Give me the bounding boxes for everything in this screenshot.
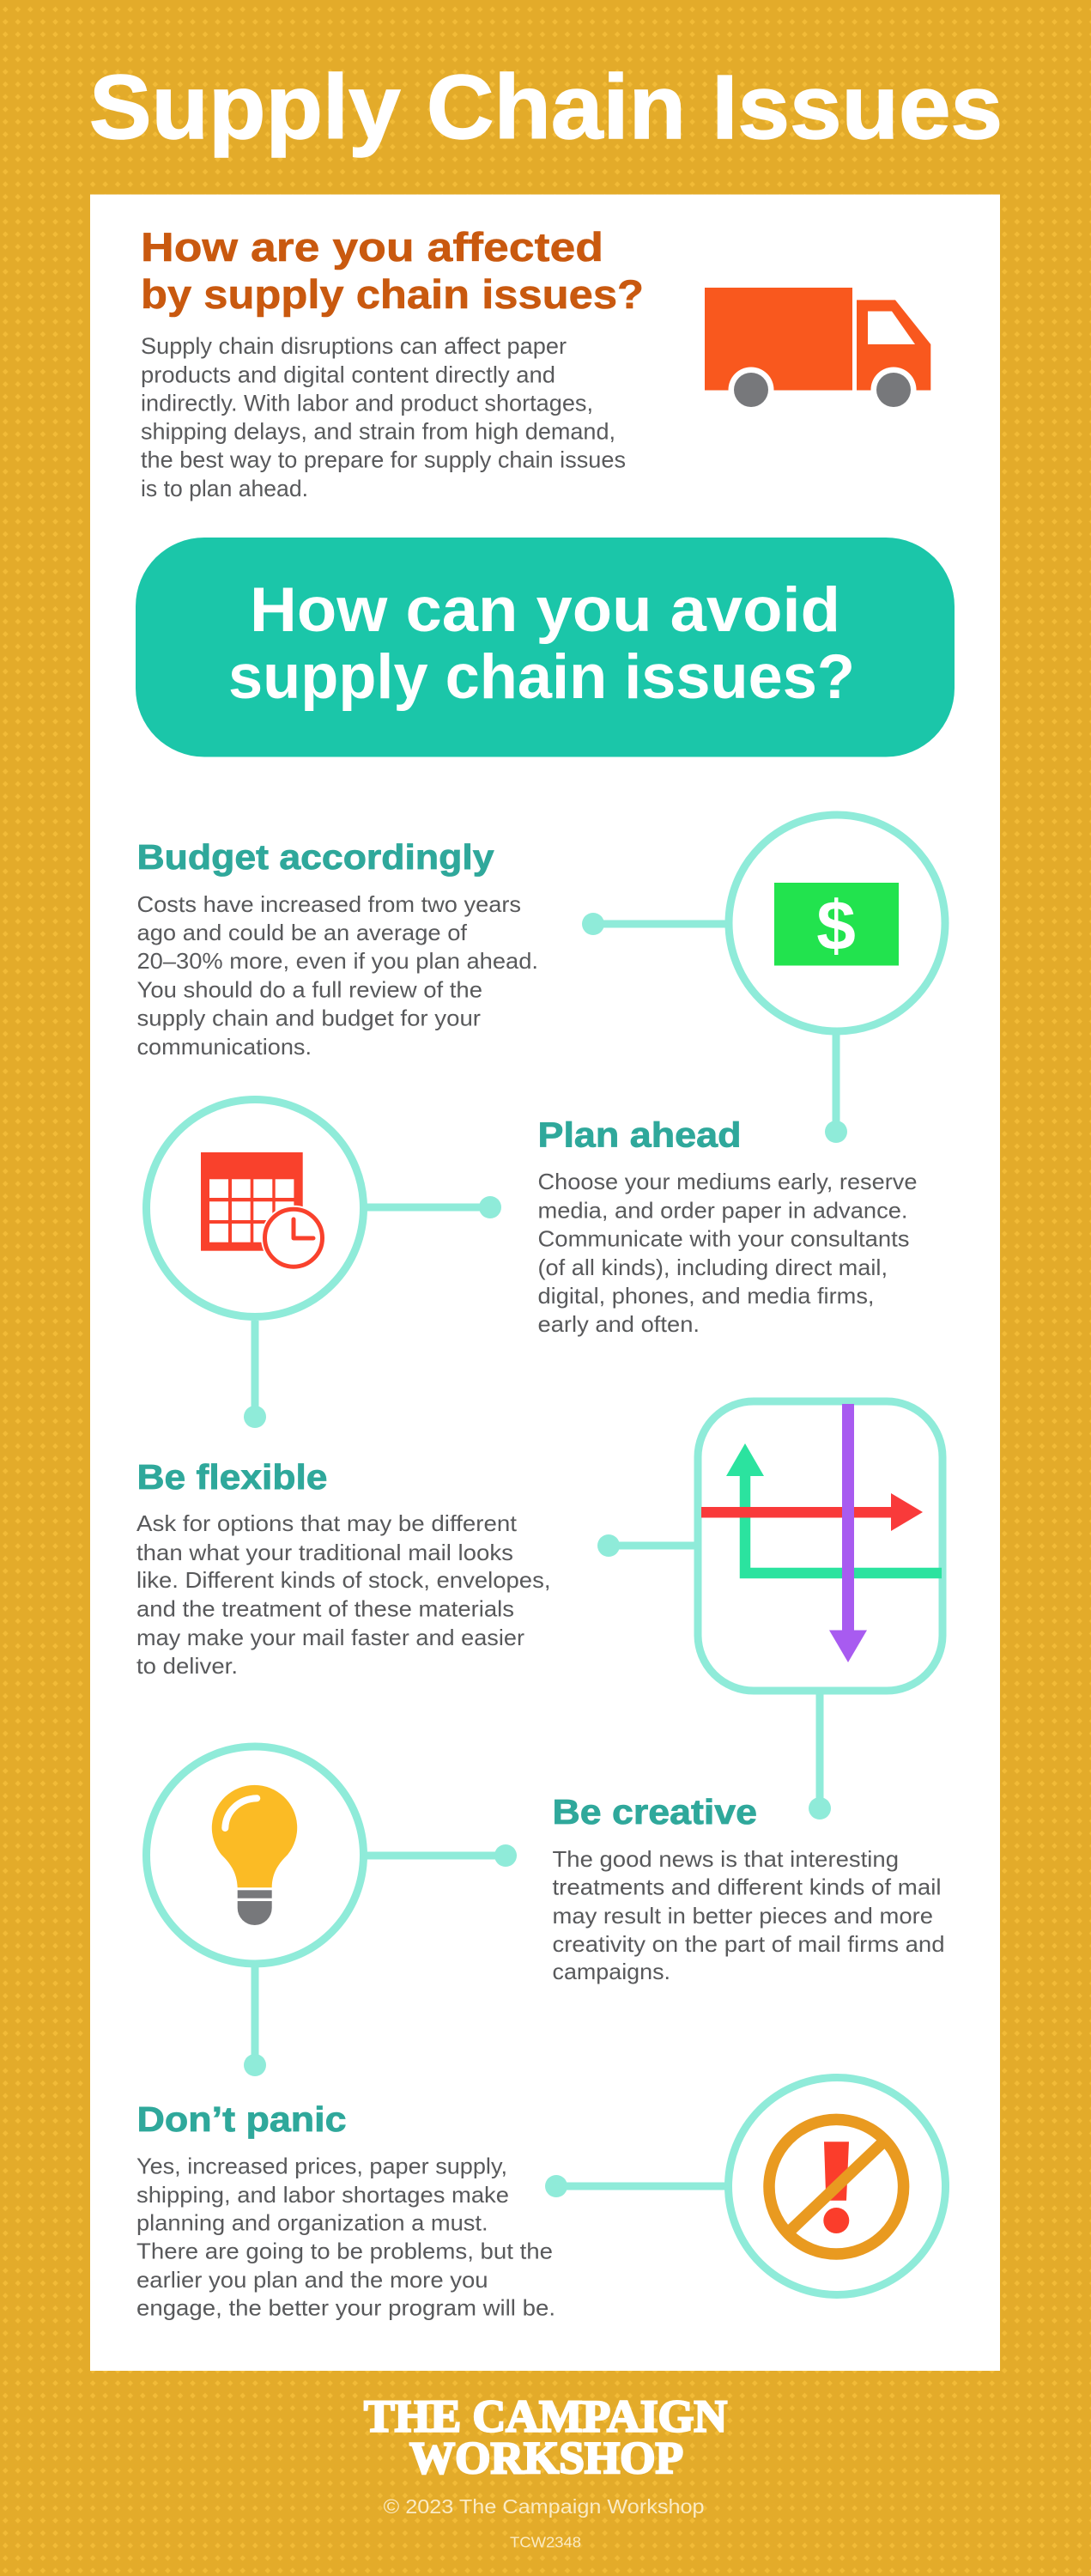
banner: how can you avoid <box>136 538 955 757</box>
text block: plan ahead: Communicate with your consultants <box>537 1226 910 1252</box>
text block: intro: products and digital content directly and <box>141 362 555 388</box>
text block: plan ahead: early and often. <box>537 1311 700 1337</box>
icon: calendar with clock <box>146 1099 364 1317</box>
text block: be flexible: and the treatment of these materials <box>136 1595 514 1621</box>
logo: the campaign workshop: WORKSHOP <box>409 2433 683 2483</box>
text block: plan ahead: Choose your mediums early, reserve <box>537 1169 917 1194</box>
text block: intro: the best way to prepare for supply chain issues <box>141 447 626 473</box>
text block: budget: communications. <box>137 1034 312 1060</box>
text block: don't panic: earlier you plan and the more you <box>136 2267 488 2293</box>
text block: intro: is to plan ahead. <box>141 476 308 501</box>
text block: budget: 20–30% more, even if you plan ahead. <box>137 948 538 974</box>
heading: be creative: Be creative <box>553 1792 757 1832</box>
text block: don't panic: Yes, increased prices, paper supply, <box>136 2154 507 2179</box>
text block: be flexible: to deliver. <box>136 1653 238 1679</box>
section: budget accordingly <box>137 815 945 1143</box>
text block: budget: supply chain and budget for your <box>137 1005 481 1031</box>
footer: copyright: © 2023 The Campaign Workshop <box>384 2495 705 2518</box>
logo: the campaign workshop: THE CAMPAIGN <box>364 2392 727 2442</box>
panel: main content <box>90 194 1000 2371</box>
text block: don't panic <box>136 2154 555 2321</box>
text block: be creative: The good news is that interesting <box>553 1846 899 1872</box>
text block: plan ahead: digital, phones, and media firms, <box>537 1283 874 1309</box>
footer: code: TCW2348 <box>510 2534 581 2551</box>
heading: how are you affected <box>141 224 644 317</box>
text block: plan ahead <box>537 1169 917 1337</box>
text block: don't panic: engage, the better your program will be. <box>136 2295 555 2321</box>
heading: how are you affected: by supply chain issues? <box>141 271 644 317</box>
text block: intro: indirectly. With labor and product shortages, <box>141 390 593 416</box>
text block: budget <box>137 891 538 1060</box>
text block: plan ahead: media, and order paper in advance. <box>537 1197 908 1223</box>
text block: budget: You should do a full review of the <box>137 977 482 1003</box>
heading: plan ahead: Plan ahead <box>537 1115 742 1154</box>
text block: be flexible <box>136 1510 551 1679</box>
section: be flexible <box>136 1401 943 1820</box>
title: Supply Chain Issues <box>89 57 1003 158</box>
text block: budget: Costs have increased from two years <box>137 891 521 917</box>
text block: be creative: campaigns. <box>553 1959 670 1984</box>
text block: don't panic: shipping, and labor shortages make <box>136 2182 509 2208</box>
connector: arrows <box>597 1534 831 1820</box>
icon: dollar bill: $ <box>816 887 856 965</box>
icon: delivery truck <box>705 288 932 412</box>
heading: be flexible: Be flexible <box>137 1457 328 1497</box>
heading: budget accordingly: Budget accordingly <box>137 837 494 877</box>
text block: don't panic: There are going to be problems, but the <box>136 2239 553 2264</box>
icon: no panic sign <box>728 2078 946 2294</box>
text block: don't panic: planning and organization a must. <box>136 2210 488 2236</box>
text block: plan ahead: (of all kinds), including direct mail, <box>537 1255 888 1280</box>
banner: how can you avoid: How can you avoid <box>250 575 840 645</box>
text block: be creative <box>553 1846 944 1984</box>
text block: be creative: creativity on the part of mail firms and <box>553 1931 944 1957</box>
text block: be creative: treatments and different kinds of mail <box>553 1874 941 1899</box>
icon: dollar bill <box>729 815 945 1031</box>
icon: light bulb <box>146 1747 364 1964</box>
connector: calendar <box>244 1196 501 1428</box>
connector: budget <box>582 913 847 1143</box>
text block: be flexible: Ask for options that may be different <box>136 1510 518 1536</box>
logo: the campaign workshop <box>364 2392 727 2483</box>
icon: crossing arrows <box>698 1401 943 1691</box>
section: plan ahead <box>146 1099 917 1428</box>
banner: how can you avoid: supply chain issues? <box>228 642 855 712</box>
text block: be flexible: than what your traditional mail looks <box>136 1540 513 1565</box>
connector: light bulb <box>244 1844 517 2076</box>
text block: be flexible: may make your mail faster and easier <box>136 1625 524 1650</box>
text block: intro <box>141 333 626 501</box>
text block: be flexible: like. Different kinds of stock, envelopes, <box>136 1567 551 1593</box>
text block: intro: shipping delays, and strain from high demand, <box>141 419 615 445</box>
heading: how are you affected: How are you affected <box>141 224 603 270</box>
section: don't panic <box>136 2078 946 2321</box>
text block: be creative: may result in better pieces and more <box>553 1903 933 1929</box>
text block: intro: Supply chain disruptions can affect paper <box>141 333 567 359</box>
text block: budget: ago and could be an average of <box>137 920 468 945</box>
connector: no panic <box>545 2175 726 2197</box>
heading: don't panic: Don’t panic <box>137 2099 347 2139</box>
section: be creative <box>146 1747 944 2076</box>
